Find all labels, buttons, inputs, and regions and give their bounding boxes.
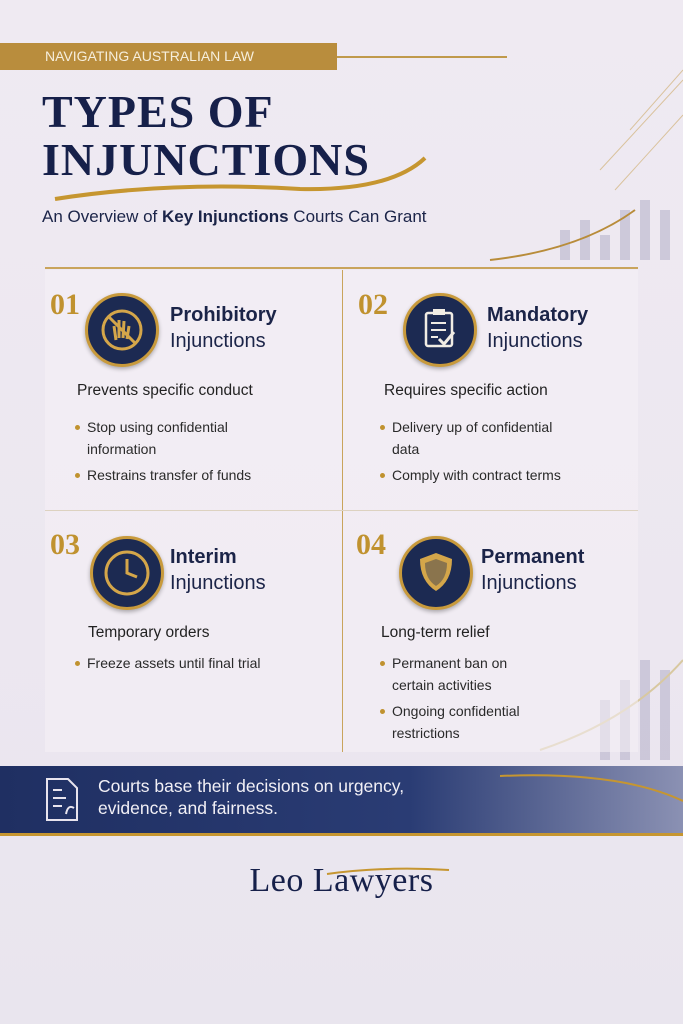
card 04: Permanent <box>481 546 584 568</box>
card 02: Mandatory <box>487 304 588 326</box>
card 03: 03 <box>50 528 80 561</box>
callout text: evidence, and fairness. <box>98 798 278 818</box>
card 04 <box>356 528 584 741</box>
card 01: Injunctions <box>170 330 266 352</box>
card 04: Injunctions <box>481 572 577 594</box>
card 02: Requires specific action <box>384 382 548 399</box>
card 04: restrictions <box>392 725 460 741</box>
card 01: Stop using confidential <box>87 419 228 435</box>
card 04: certain activities <box>392 677 492 693</box>
icon: shield <box>399 536 473 610</box>
card 03: Interim <box>170 546 237 568</box>
card 03: Temporary orders <box>88 624 209 641</box>
icon: no hand <box>85 293 159 367</box>
grid panel <box>45 270 638 752</box>
icon: clock <box>90 536 164 610</box>
callout text <box>98 776 404 818</box>
card 02: Comply with contract terms <box>392 467 561 483</box>
icon: document <box>46 778 78 821</box>
card 01: 01 <box>50 288 80 321</box>
card 01: Prevents specific conduct <box>77 382 253 399</box>
logo: Leo Lawyers <box>250 862 433 899</box>
card 04: Permanent ban on <box>392 655 507 671</box>
card 02: Delivery up of confidential <box>392 419 552 435</box>
card 04: Ongoing confidential <box>392 703 520 719</box>
title: TYPES OF <box>42 86 274 137</box>
callout text: Courts base their decisions on urgency, <box>98 776 404 796</box>
card 03: Injunctions <box>170 572 266 594</box>
footer band <box>0 766 683 836</box>
card 02: Injunctions <box>487 330 583 352</box>
title <box>42 86 370 185</box>
card 01: Prohibitory <box>170 304 277 326</box>
banner <box>0 43 337 70</box>
swoosh <box>54 156 426 201</box>
card 04: Long-term relief <box>381 624 490 641</box>
card 01: information <box>87 441 156 457</box>
card 02: data <box>392 441 419 457</box>
card 04: 04 <box>356 528 386 561</box>
card 03 <box>50 528 266 671</box>
banner: NAVIGATING AUSTRALIAN LAW <box>45 48 254 64</box>
card 02: 02 <box>358 288 388 321</box>
card 02 <box>358 288 588 483</box>
card 01: Restrains transfer of funds <box>87 467 251 483</box>
card 01 <box>50 288 277 483</box>
subtitle: An Overview of Key Injunctions Courts Can Grant <box>42 207 427 226</box>
title: INJUNCTIONS <box>42 134 370 185</box>
decorative right chart <box>490 70 683 760</box>
icon: clipboard <box>403 293 477 367</box>
card 03: Freeze assets until final trial <box>87 655 261 671</box>
